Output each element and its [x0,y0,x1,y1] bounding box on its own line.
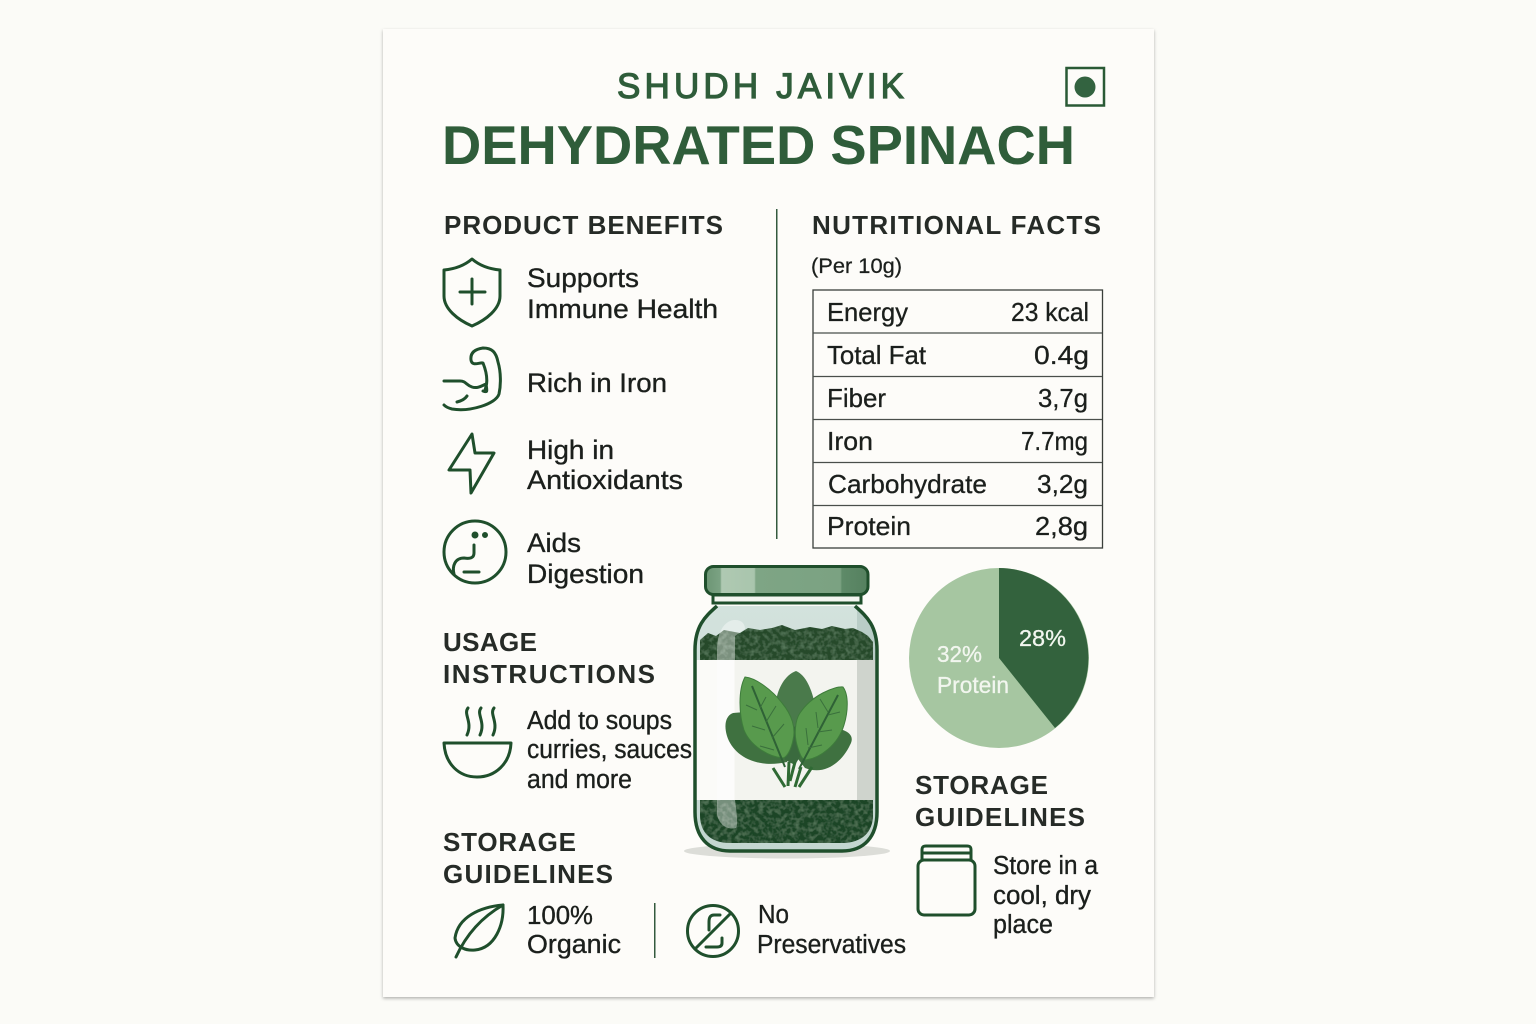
product card [383,29,1154,997]
nutrition table [813,290,1102,548]
pie: dark segment [999,568,1088,728]
heading: nutritional facts: NUTRITIONAL FACTS [812,210,1101,240]
pie: light segment [909,568,1089,748]
pie chart [909,568,1089,748]
heading: product benefits: PRODUCT BENEFITS [444,210,723,240]
leaf stems [773,762,812,787]
jar body [695,606,877,851]
product title: DEHYDRATED SPINACH [442,114,1075,176]
benefit: antioxidants [527,435,683,495]
right bright leaf [795,687,847,760]
nutrition table: Carbohydrate [828,469,987,499]
storage text: Store in a [993,852,1099,880]
label: 32% protein: Protein [937,672,1009,698]
jar neck [713,595,861,603]
badge: organic [527,902,621,959]
header [442,67,1104,176]
storage text: place [993,911,1053,939]
icon: storage jar [918,846,975,915]
icon: digestion face [444,521,506,583]
panel: storage guidelines right [915,770,1099,939]
small divider [654,903,656,958]
serving size: (Per 10g) [811,255,902,278]
jar lid [706,566,868,594]
jar shadow [684,844,890,858]
heading: storage guidelines: GUIDELINES [443,859,613,889]
dried spinach bottom [700,798,873,843]
nutrition table: 23 kcal [1011,297,1089,327]
label: 28%: 28% [1019,625,1066,651]
badge: no preservatives: Preservatives [757,931,906,959]
illustration: spinach jar [684,566,890,858]
jar contents [696,606,877,843]
nutrition table: Energy [827,297,908,327]
nutrition table: 0.4g [1034,340,1089,370]
badge: organic: 100% [527,902,593,930]
usage text: Add to soups [527,707,672,735]
icon: no preservatives [688,906,738,956]
label [734,660,857,800]
divider between columns [776,209,778,539]
heading: storage guidelines: STORAGE [443,827,576,857]
label: 32% protein: 32% [937,641,982,667]
panel: product benefits [444,210,723,589]
benefit: immune health [527,263,718,324]
glass highlight [717,620,745,828]
panel: nutritional facts [811,210,1102,548]
storage text [993,852,1099,939]
heading: usage instructions: INSTRUCTIONS [443,659,655,689]
nutrition table: Iron [827,426,873,456]
benefit: digestion: Aids [527,528,581,558]
benefit: immune health: Immune Health [527,294,718,324]
panel: usage instructions [443,627,692,794]
icon: shield [444,259,500,326]
badge: organic: Organic [527,931,621,959]
nutrition table: 2,8g [1035,511,1088,541]
heading: storage guidelines [443,827,613,889]
right dark leaf [795,730,852,770]
nutrition table: 3,7g [1038,383,1088,413]
panel: storage guidelines left [443,827,906,959]
centre shadow [782,725,804,765]
infographic canvas [381,28,1156,1000]
heading: usage instructions: USAGE [443,627,537,657]
benefit: antioxidants: High in [527,435,614,465]
nutrition table: Fiber [827,383,886,413]
icon: flexed arm [444,348,500,410]
dried spinach top [700,625,873,662]
badge: no preservatives: No [758,901,789,929]
back centre leaf [776,671,815,735]
usage text [527,707,692,794]
jar outline [695,606,877,851]
nutrition table: 7.7mg [1021,426,1088,456]
heading: storage guidelines: STORAGE [915,770,1048,800]
icon: steaming bowl [444,708,511,777]
heading: storage guidelines [915,770,1085,832]
spinach leaves [725,671,852,787]
benefit: antioxidants: Antioxidants [527,465,683,495]
nutrition table: 3,2g [1037,469,1088,499]
benefit: digestion [527,528,644,589]
leaf veins [746,697,840,750]
benefit: digestion: Digestion [527,559,644,589]
leaf midribs [752,686,838,769]
usage text: curries, sauces [527,736,692,764]
label: 32% protein [937,641,1009,698]
icon: vegetarian mark [1066,68,1104,106]
nutrition table: Protein [827,511,911,541]
icon: leaf [455,905,503,957]
glass right shade [857,610,876,660]
usage text: and more [527,766,632,794]
storage text: cool, dry [993,882,1091,910]
brand name: SHUDH JAIVIK [617,67,904,106]
icon: lightning bolt [449,434,494,493]
benefit: iron: Rich in Iron [527,368,667,398]
benefit: immune health: Supports [527,263,639,293]
heading: usage instructions [443,627,655,689]
left bright leaf [740,677,794,758]
badge: no preservatives [757,901,906,959]
nutrition table: Total Fat [827,340,927,370]
heading: storage guidelines: GUIDELINES [915,802,1085,832]
left dark leaf [725,712,790,764]
